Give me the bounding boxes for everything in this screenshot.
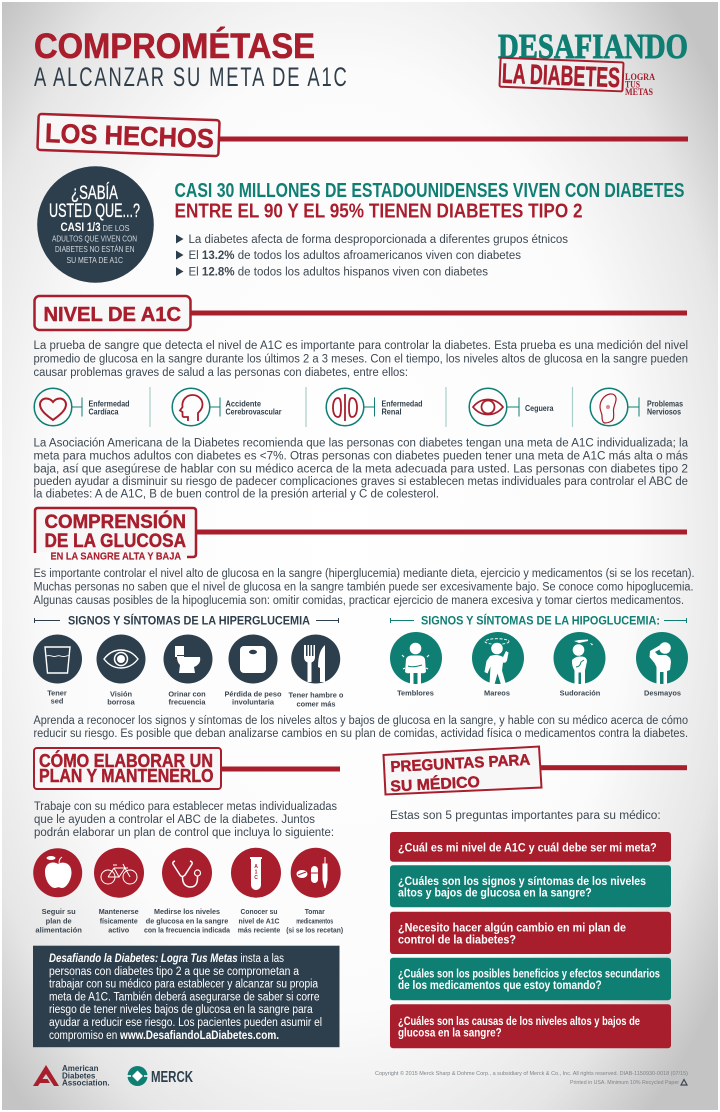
- text: recognize symptoms: [34, 715, 688, 740]
- labels: hypoglycemia symptoms: Mareos: [484, 688, 510, 698]
- label: Problemas Nerviosos: Problemas: [647, 398, 683, 408]
- icon: A1C test tube: 1: [255, 870, 258, 876]
- icon: A1C test tube: C: [254, 875, 258, 881]
- bullet list: El 12.8% de todos los adultos hispanos viven con diabetes: [188, 266, 488, 278]
- labels: hyperglycemia symptoms: involuntaria: [232, 698, 275, 706]
- heading: Los hechos: LOS HECHOS: [44, 118, 214, 154]
- text: A1C intro: causar problemas graves de salud a las personas con diabetes, entre ellos:: [34, 367, 408, 379]
- callout: ¿Sabía usted que...?: ADULTOS QUE VIVEN CON: [52, 234, 137, 244]
- text: A1C goal: la diabetes: A de A1C, B de buen control de la presión arterial y C de colesterol.: [34, 488, 439, 500]
- text: glucose intro: [34, 568, 694, 607]
- question 4: [390, 958, 671, 1000]
- labels: hyperglycemia symptoms: sed: [51, 696, 64, 706]
- callout: ¿Sabía usted que...?: CASI 1/3 DE LOS: [60, 222, 130, 234]
- text: A1C intro: [34, 340, 688, 379]
- question 5: glucosa en la sangre?: [398, 1026, 502, 1040]
- labels: hyperglycemia symptoms: Pérdida de peso: [224, 690, 282, 698]
- labels: plan items: nivel de A1C: [238, 916, 280, 926]
- labels: plan items: activo: [108, 926, 130, 934]
- icon: medications: [291, 848, 341, 898]
- heading: Cómo elaborar un plan: PLAN Y MANTENERLO: [39, 766, 214, 786]
- bullet list: [176, 234, 568, 278]
- title: COMPROMÉTASE: [34, 26, 315, 66]
- text: glucose intro: Muchas personas no saben que el nivel de glucosa en la sangre también puede ser excesivamente bajo. Se conoce como hipoglucemia.: [34, 582, 694, 594]
- copyright: [375, 1070, 688, 1086]
- label: Problemas Nerviosos: [647, 398, 683, 416]
- callout: ¿Sabía usted que...?: USTED QUE...?: [49, 201, 140, 222]
- question 2: [390, 865, 671, 907]
- icon: trembling person: [390, 632, 442, 684]
- labels: plan items: Conocer su: [240, 907, 278, 916]
- labels: hyperglycemia symptoms: borrosa: [107, 698, 136, 706]
- key facts headline: ENTRE EL 90 Y EL 95% TIENEN DIABETES TIPO 2: [174, 200, 582, 222]
- title: [34, 26, 347, 92]
- labels: plan items: medicamentos: [296, 916, 333, 926]
- heading: Preguntas para su médico: PREGUNTAS PARA: [390, 752, 531, 776]
- question 3: ¿Necesito hacer algún cambio en mi plan de: [398, 921, 626, 935]
- logo: American Diabetes Association: American: [62, 1064, 99, 1073]
- heading: Los hechos: [37, 114, 688, 156]
- icon: glass of water: [33, 634, 82, 684]
- question 4: ¿Cuáles son los posibles beneficios y efectos secundarios: [398, 966, 660, 980]
- logo: Merck: MERCK: [151, 1069, 194, 1086]
- question 3: [390, 912, 671, 954]
- text: plan intro: [34, 801, 337, 839]
- bullet list: La diabetes afecta de forma desproporcionada a diferentes grupos étnicos: [188, 234, 568, 246]
- question 2: ¿Cuáles son los signos y síntomas de los niveles: [398, 874, 646, 888]
- labels: plan items: (si se los recetan): [286, 926, 344, 934]
- logo: Desafiando la Diabetes: TUS: [625, 80, 640, 90]
- question 5: [390, 1004, 671, 1048]
- icon: scale: [228, 634, 278, 684]
- icon: eye: [469, 388, 519, 426]
- text: A1C intro: promedio de glucosa en la sangre durante los últimos 2 a 3 meses. Con el tiempo, los niveles altos de glucosa en la sangre pueden: [34, 354, 688, 366]
- panel: commitment callout: personas con diabetes tipo 2 a que se comprometan a: [49, 966, 300, 978]
- logo: Desafiando la Diabetes: METAS: [625, 87, 653, 97]
- text: recognize symptoms: reducir su riesgo. Es posible que deban analizarse cambios en su plan de comidas, actividad física o medicamentos contra la diabetes.: [34, 728, 688, 740]
- panel: commitment callout: riesgo de tener niveles bajos de glucosa en la sangre para: [49, 1004, 313, 1016]
- labels: hyperglycemia symptoms: Tener: [47, 688, 67, 698]
- heading: Preguntas para su médico: SU MÉDICO: [390, 774, 480, 795]
- heading: Cómo elaborar un plan: [34, 748, 340, 789]
- text: A1C goal: [34, 438, 689, 500]
- labels: plan items: Tomar: [305, 907, 325, 916]
- label: Enfermedad Renal: Renal: [382, 406, 402, 416]
- callout: ¿Sabía usted que...?: ¿SABÍA: [71, 183, 118, 204]
- question 4: de los medicamentos que estoy tomando?: [398, 978, 602, 992]
- label: Accidente Cerebrovascular: Accidente: [226, 398, 261, 408]
- copyright: Printed in USA. Minimum 10% Recycled Paper: [570, 1080, 679, 1086]
- labels: hyperglycemia symptoms: comer más: [296, 700, 336, 708]
- heading: Comprensión de la glucosa: EN LA SANGRE ALTA Y BAJA: [50, 550, 181, 562]
- labels: hyperglycemia symptoms: Orinar con: [168, 690, 206, 698]
- logo: American Diabetes Association: Association.: [62, 1078, 110, 1088]
- text: glucose intro: Algunas causas posibles de la hipoglucemia son: omitir comidas, practicar ejercicio de manera excesiva y tomar ciertos medicamentos.: [34, 595, 684, 607]
- icon: eye: [96, 634, 146, 684]
- heading: hyperglycemia symptoms: SIGNOS Y SÍNTOMAS DE LA HIPERGLUCEMIA: [68, 612, 310, 628]
- logo: Desafiando la Diabetes: [498, 27, 688, 97]
- label: Problemas Nerviosos: Nerviosos: [647, 406, 681, 416]
- heading: Nivel de A1C: [34, 296, 687, 330]
- callout: ¿Sabía usted que...?: SU META DE A1C: [66, 255, 123, 265]
- labels: plan items: alimentación: [35, 926, 82, 934]
- icon: sweating person: [554, 632, 606, 684]
- icon: head: [172, 388, 220, 426]
- label: Enfermedad Cardíaca: Enfermedad: [88, 398, 130, 408]
- labels: hyperglycemia symptoms: Visión: [110, 690, 133, 698]
- icon: heart: [34, 388, 82, 426]
- label: Enfermedad Renal: [382, 398, 422, 416]
- text: plan intro: Trabaje con su médico para establecer metas individualizadas: [34, 801, 337, 813]
- logo: Merck: [127, 1066, 194, 1086]
- icon: fork and knife: [291, 634, 340, 684]
- panel: commitment callout: [33, 946, 340, 1047]
- question 5: ¿Cuáles son las causas de los niveles altos y bajos de: [398, 1014, 640, 1028]
- heading: Comprensión de la glucosa: [35, 508, 687, 562]
- label: Ceguera: Ceguera: [525, 403, 554, 413]
- text: A1C goal: pueden ayudar a disminuir su riesgo de padecer complicaciones graves si establecen metas individuales para controlar el ABC de: [34, 476, 688, 488]
- panel: commitment callout: trabajar con su médico para establecer y alcanzar su propia: [49, 979, 319, 991]
- label: Accidente Cerebrovascular: Cerebrovascular: [226, 406, 282, 416]
- text: questions intro: Estas son 5 preguntas importantes para su médico:: [390, 810, 661, 822]
- heading: Nivel de A1C: NIVEL DE A1C: [44, 303, 181, 326]
- copyright: Copyright © 2015 Merck Sharp & Dohme Corp., a subsidiary of Merck & Co., Inc. All rights reserved. DIAB-1150930-0018 (07/15): [375, 1070, 688, 1077]
- logo: American Diabetes Association: Diabetes: [62, 1072, 96, 1080]
- text: A1C intro: La prueba de sangre que detecta el nivel de A1C es importante para controlar la diabetes. Esta prueba es una medición del nivel: [34, 340, 688, 352]
- panel: commitment callout: compromiso en www.DesafiandoLaDiabetes.com.: [49, 1030, 279, 1042]
- labels: plan items: físicamente: [100, 916, 138, 926]
- text: glucose intro: Es importante controlar el nivel alto de glucosa en la sangre (hiperglucemia) mediante dieta, ejercicio y medicamentos (si se los recetan).: [34, 568, 694, 580]
- labels: plan items: Seguir su: [42, 907, 76, 916]
- question 3: control de la diabetes?: [398, 932, 516, 946]
- text: A1C goal: baja, así que asegúrese de hablar con su médico acerca de la meta adecuada para usted. Las personas con diabetes tipo 2: [34, 464, 688, 476]
- question 1: ¿Cuál es mi nivel de A1C y cuál debe ser mi meta?: [398, 841, 657, 855]
- labels: hypoglycemia symptoms: Sudoración: [560, 688, 601, 698]
- heading: Comprensión de la glucosa: COMPRENSIÓN: [44, 509, 186, 533]
- labels: plan items: más reciente: [238, 926, 280, 934]
- icon: dizzy person: [472, 632, 524, 684]
- labels: hypoglycemia symptoms: Desmayos: [644, 688, 681, 698]
- labels: plan items: Medirse los niveles: [154, 907, 220, 916]
- icon: stethoscope: [162, 848, 212, 898]
- text: plan intro: podrán elaborar un plan de control que incluya lo siguiente:: [34, 827, 334, 839]
- heading: Cómo elaborar un plan: CÓMO ELABORAR UN: [39, 750, 213, 771]
- complications icons row: [34, 387, 683, 427]
- title: A ALCANZAR SU META DE A1C: [34, 61, 347, 92]
- text: recognize symptoms: Aprenda a reconocer los signos y síntomas de los niveles altos y bajos de glucosa en la sangre, y hable con su médico acerca de cómo: [34, 715, 688, 727]
- labels: plan items: de glucosa en la sangre: [146, 916, 228, 926]
- text: plan intro: que le ayuden a controlar el ABC de la diabetes. Juntos: [34, 814, 315, 826]
- icon: bicycle: [94, 848, 144, 898]
- callout: ¿Sabía usted que...?: DIABETES NO ESTÁN EN: [55, 244, 134, 254]
- bullet list: El 13.2% de todos los adultos afroamericanos viven con diabetes: [188, 250, 521, 262]
- icon: toilet: [164, 634, 212, 684]
- labels: hyperglycemia symptoms: Tener hambre o: [289, 690, 344, 700]
- icon: foot: [590, 388, 639, 426]
- panel: commitment callout: ayudar a reducir ese riesgo. Los pacientes pueden asumir el: [49, 1017, 322, 1029]
- callout: ¿Sabía usted que...?: [37, 166, 154, 283]
- labels: plan items: con la frecuencia indicada: [144, 926, 231, 934]
- label: Enfermedad Cardíaca: Cardíaca: [88, 406, 119, 416]
- text: A1C goal: meta para muchos adultos con diabetes es <7%. Otras personas con diabetes pueden tener una meta de A1C más alta o más: [34, 450, 688, 462]
- icon: apple: [33, 848, 82, 897]
- heading: hypoglycemia symptoms: SIGNOS Y SÍNTOMAS DE LA HIPOGLUCEMIA:: [421, 612, 660, 628]
- text: A1C goal: La Asociación Americana de la Diabetes recomienda que las personas con diabetes tengan una meta de A1C individualizada; la: [34, 438, 689, 450]
- panel: commitment callout: meta de A1C. También deberá asegurarse de saber si corre: [49, 992, 320, 1004]
- question 2: altos y bajos de glucosa en la sangre?: [398, 886, 592, 900]
- labels: hyperglycemia symptoms: [47, 688, 344, 708]
- label: Enfermedad Renal: Enfermedad: [382, 398, 422, 408]
- heading: Comprensión de la glucosa: DE LA GLUCOSA: [44, 530, 186, 552]
- panel: commitment callout: Desafiando la Diabetes: Logra Tus Metas insta a las: [49, 953, 284, 965]
- icon: fainting person: [636, 632, 688, 684]
- labels: plan items: [35, 907, 344, 934]
- icon: A1C test tube: A: [254, 864, 258, 870]
- labels: hyperglycemia symptoms: frecuencia: [169, 698, 206, 706]
- labels: plan items: plan de: [46, 916, 72, 926]
- icon: kidneys: [326, 388, 374, 426]
- label: Accidente Cerebrovascular: [226, 398, 282, 416]
- key facts headline: [174, 179, 684, 222]
- labels: hypoglycemia symptoms: [397, 688, 681, 698]
- labels: plan items: Mantenerse: [99, 907, 139, 916]
- icon: A1C test tube: [231, 848, 281, 898]
- logo: American Diabetes Association: [33, 1064, 110, 1088]
- question 1: [390, 832, 671, 862]
- logo: Desafiando la Diabetes: LA DIABETES: [501, 58, 621, 93]
- labels: hypoglycemia symptoms: Temblores: [397, 688, 434, 698]
- heading: Preguntas para su médico: [384, 746, 687, 795]
- label: Enfermedad Cardíaca: [88, 398, 130, 416]
- logo: Desafiando la Diabetes: LOGRA: [625, 72, 655, 82]
